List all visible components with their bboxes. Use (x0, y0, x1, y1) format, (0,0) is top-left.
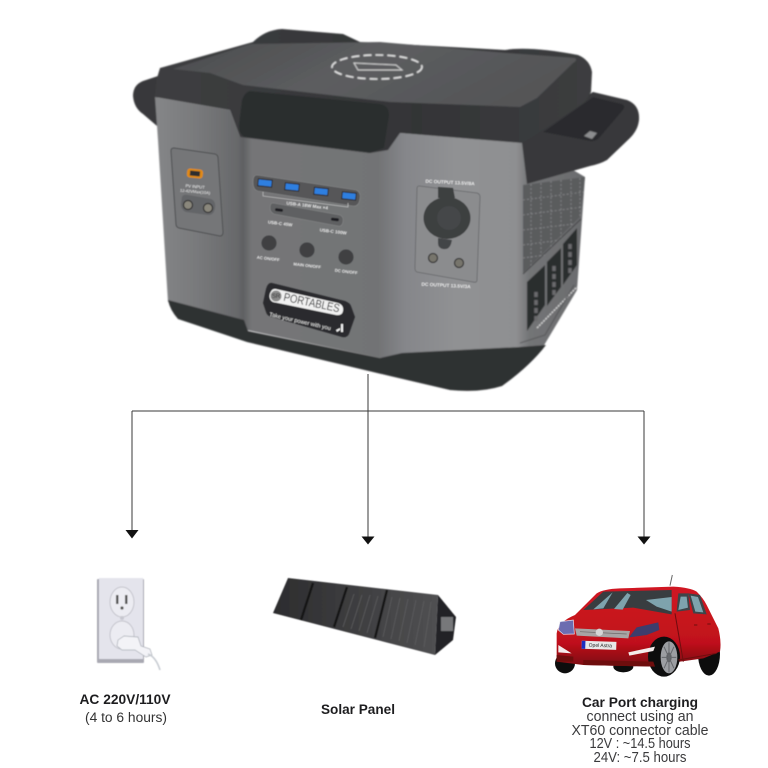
USB-C 100W label: USB-C 100W (319, 227, 348, 236)
connector tree (126, 374, 650, 544)
brand badge (263, 283, 355, 337)
label: AC charging (80, 692, 170, 725)
socket 1 (527, 265, 545, 331)
DC barrel jacks (428, 254, 438, 262)
lower receptacle (110, 621, 134, 649)
DC power button (334, 250, 358, 275)
USB-C panel (268, 203, 348, 236)
right carry handle (522, 92, 639, 184)
car side windows (677, 593, 707, 614)
USB-A label: USB-A 18W Max ×4 (286, 200, 329, 211)
brand name: PORTABLES (282, 292, 341, 315)
DC power button: DC ON/OFF (334, 268, 358, 275)
label: car port charging: connect using an (586, 709, 694, 725)
upper receptacle (110, 587, 134, 617)
side mesh vent (523, 177, 585, 274)
wireless charging pad (332, 55, 422, 79)
DC output panel (415, 179, 480, 290)
car grille (575, 628, 630, 638)
label: car port charging (572, 695, 708, 766)
car door details (675, 613, 717, 662)
main power button (293, 242, 322, 270)
USB-C 45W label: USB-C 45W (268, 220, 294, 228)
left carry handle (133, 76, 158, 126)
label: car port charging: 12V : ~14.5 hours (590, 736, 690, 752)
car bumper details (557, 655, 655, 667)
label: car port charging: 24V: ~7.5 hours (594, 750, 686, 766)
car body (557, 587, 721, 667)
USB-C ports (275, 208, 283, 212)
car windshield (583, 590, 672, 614)
top surface (173, 42, 576, 107)
number plate: Opel Astra (589, 643, 612, 649)
DC output bottom label: DC OUTPUT 13.5V/3A (421, 282, 471, 290)
label: AC charging: AC 220V/110V (80, 692, 170, 707)
walking figure icon (336, 324, 343, 332)
PV input label: PV INPUT (185, 183, 205, 190)
front dark vent panel (239, 91, 389, 153)
front right wheel (648, 637, 680, 677)
label: AC charging: (4 to 6 hours) (85, 710, 167, 725)
label: car port charging: XT60 connector cable (572, 723, 708, 739)
car headlights (558, 620, 574, 634)
main power button: MAIN ON/OFF (293, 261, 322, 270)
lid (155, 29, 592, 153)
arrow: solar (362, 536, 374, 544)
tagline: Take your power with you (269, 312, 331, 332)
arrow: car (638, 536, 650, 544)
socket 3 (563, 228, 577, 285)
brand initials: SR (272, 294, 281, 300)
socket 2 (547, 248, 561, 306)
product: portable power station (133, 29, 639, 391)
PV input panel (171, 148, 223, 236)
gray body shell (155, 97, 585, 358)
PV input panel: 12-42VMax(10A) (180, 188, 211, 195)
AC power button: AC ON/OFF (256, 255, 280, 262)
DC input posts (181, 195, 215, 215)
icon: solar panel (273, 578, 456, 655)
label: car port charging: Car Port charging (582, 695, 698, 710)
icon: red car (555, 575, 721, 677)
USB-A panel (253, 175, 360, 211)
car wheels (555, 632, 720, 676)
arrow: AC (126, 530, 138, 538)
icon: wall outlet with plug (97, 578, 160, 670)
plug and cord (117, 636, 160, 670)
DC output top label: DC OUTPUT 13.5V/8A (425, 179, 475, 187)
device controls and ports (171, 148, 480, 337)
USB-A ports (258, 179, 272, 187)
bottom rubber base (168, 300, 546, 391)
AC power button (256, 236, 280, 262)
label: solar panel: Solar Panel (321, 702, 395, 717)
cigarette socket with cap (438, 187, 455, 198)
number plate (582, 641, 616, 650)
AC socket side panel (520, 228, 577, 343)
XT60 port (187, 168, 203, 179)
